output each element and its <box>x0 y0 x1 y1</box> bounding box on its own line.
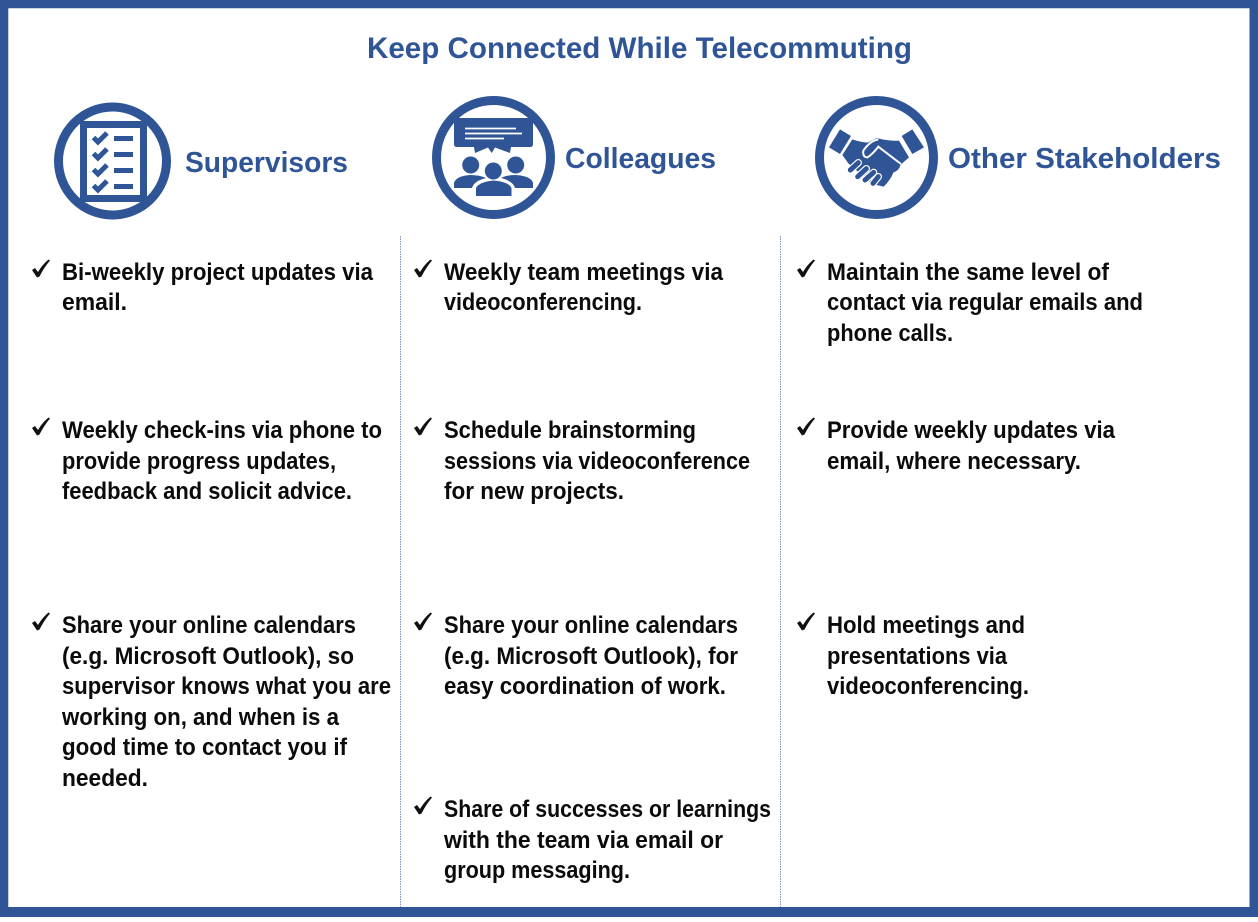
column header: colleagues <box>436 100 716 214</box>
heading: colleagues: Colleagues <box>565 143 716 175</box>
item: share calendars: good time to contact you if <box>62 734 348 761</box>
item: maintain contact: Maintain the same level of <box>827 259 1110 286</box>
item: weekly check-ins: feedback and solicit advice. <box>62 478 352 505</box>
item: share calendars <box>32 612 391 792</box>
item: hold meetings: videoconferencing. <box>827 673 1029 700</box>
item: weekly updates: Provide weekly updates via <box>827 417 1116 444</box>
item: maintain contact <box>797 259 1143 347</box>
item: weekly check-ins <box>32 417 382 505</box>
column divider right <box>780 236 782 907</box>
item: brainstorming: sessions via videoconference <box>444 448 750 475</box>
item: hold meetings: Hold meetings and <box>827 612 1025 639</box>
item: brainstorming <box>414 417 750 505</box>
item: brainstorming: for new projects. <box>444 478 624 505</box>
item: share successes: group messaging. <box>444 857 630 884</box>
item: maintain contact: phone calls. <box>827 320 953 347</box>
item: maintain contact: contact via regular emails and <box>827 289 1143 316</box>
item: weekly check-ins: provide progress updates, <box>62 448 336 475</box>
item: share successes: with the team via email or <box>443 827 723 854</box>
item: share calendars: working on, and when is a <box>61 704 340 731</box>
item: share calendars: (e.g. Microsoft Outlook), so <box>62 643 354 670</box>
item: weekly updates: email, where necessary. <box>827 448 1081 475</box>
item: hold meetings: presentations via <box>827 643 1008 670</box>
item: weekly updates <box>797 417 1116 475</box>
item: share calendars: (e.g. Microsoft Outlook), for <box>444 643 738 670</box>
item: team meetings <box>414 259 724 316</box>
column divider left <box>400 236 402 907</box>
item: weekly check-ins: Weekly check-ins via phone to <box>62 417 382 444</box>
item: brainstorming: Schedule brainstorming <box>444 417 696 444</box>
icon: handshake <box>820 100 934 214</box>
panel: colleagues list <box>414 259 771 884</box>
item: share calendars: supervisor knows what you are <box>62 673 391 700</box>
icon: checklist <box>58 107 166 215</box>
title: Keep Connected While Telecommuting <box>367 32 912 65</box>
panel: other stakeholders list <box>797 259 1143 700</box>
item: share calendars: easy coordination of work. <box>444 673 726 700</box>
panel: supervisors list <box>32 259 391 792</box>
column header: other stakeholders <box>820 100 1221 214</box>
item: bi-weekly updates: email. <box>62 289 127 316</box>
item: share calendars: needed. <box>62 765 148 792</box>
item: share successes: Share of successes or learnings <box>444 796 771 823</box>
item: bi-weekly updates: Bi-weekly project updates via <box>62 259 374 286</box>
item: bi-weekly updates <box>32 259 374 316</box>
item: team meetings: videoconferencing. <box>444 289 642 316</box>
column header: supervisors <box>58 107 348 215</box>
item: share calendars: Share your online calendars <box>444 612 738 639</box>
item: share calendars: Share your online calendars <box>62 612 356 639</box>
item: team meetings: Weekly team meetings via <box>444 259 724 286</box>
icon: team meeting <box>436 100 550 214</box>
heading: other stakeholders: Other Stakeholders <box>948 143 1221 175</box>
item: share calendars <box>414 612 738 700</box>
item: share successes <box>414 796 771 884</box>
item: hold meetings <box>797 612 1029 700</box>
heading: supervisors: Supervisors <box>185 147 348 179</box>
